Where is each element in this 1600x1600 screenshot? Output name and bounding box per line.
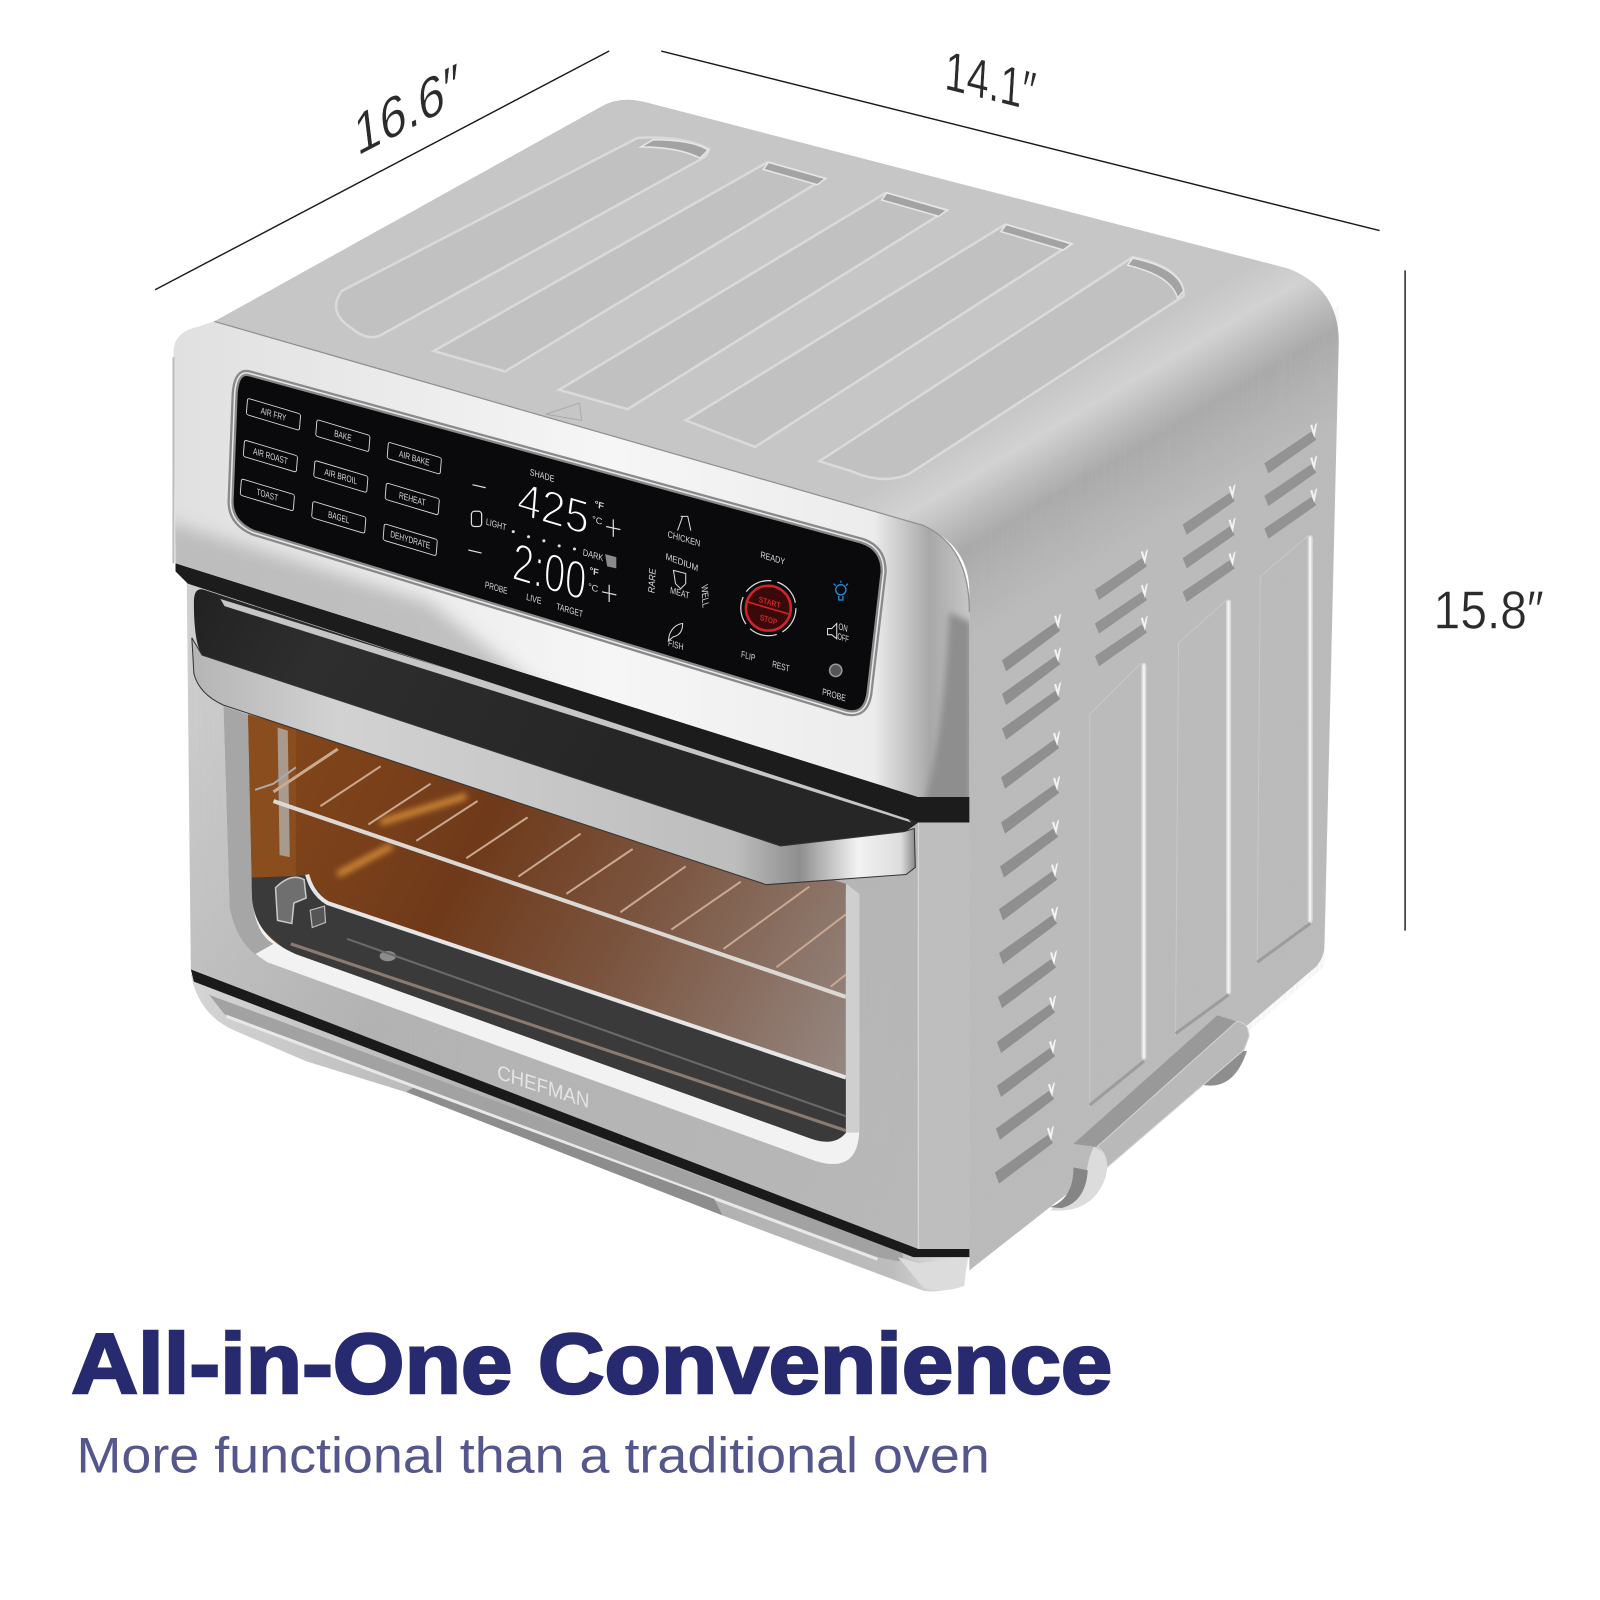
- doneness selector: [646, 516, 711, 652]
- warm light reflections: [338, 796, 466, 874]
- door handle: [192, 589, 918, 885]
- door column seam: [917, 822, 919, 1249]
- mode buttons: AIR ROAST: [253, 445, 288, 466]
- front wheel: [1050, 1147, 1107, 1211]
- side brushed finish: [1250, 307, 1338, 1030]
- foot bar: [1097, 1021, 1249, 1167]
- back wall and tray glow: [245, 704, 857, 1153]
- display: [468, 466, 620, 619]
- start stop button: START: [759, 594, 781, 610]
- mode buttons: AIR BAKE: [399, 448, 430, 468]
- display: TARGET: [556, 600, 584, 619]
- brand logo: CHEFMAN: [497, 1061, 590, 1113]
- icon: speaker: [828, 623, 837, 639]
- display: PROBE: [485, 579, 508, 596]
- side embossed panels: [1090, 536, 1310, 1107]
- display: LIGHT: [486, 516, 507, 533]
- recess above handle: [194, 589, 918, 846]
- doneness selector: FISH: [668, 637, 684, 652]
- mode buttons: REHEAT: [399, 489, 426, 508]
- title: All-in-One Convenience: [71, 1316, 1112, 1412]
- screw: [380, 951, 396, 961]
- side vent column 1: [995, 613, 1061, 1184]
- top vent recesses: [336, 137, 1184, 479]
- dimension: depth line: [155, 51, 609, 290]
- fascia left edge: [172, 357, 174, 563]
- left rack rail: [278, 728, 290, 857]
- rear wheel: [1198, 1051, 1247, 1086]
- dark oven floor: [250, 876, 846, 1148]
- control fascia: [163, 321, 971, 806]
- window bevel: [223, 706, 859, 1164]
- start stop button: [741, 549, 796, 674]
- handle front: [192, 638, 915, 885]
- right controls: OFF: [837, 630, 849, 644]
- display: °C: [592, 513, 603, 527]
- lower bracket: [276, 877, 306, 923]
- start stop button: REST: [772, 658, 790, 674]
- panel bezel and glass: [231, 373, 884, 713]
- display: 425: [515, 473, 591, 546]
- left wall: [248, 714, 296, 898]
- right controls: ON: [838, 620, 848, 634]
- display: °F: [594, 498, 605, 512]
- mode buttons: AIR BROIL: [324, 466, 358, 486]
- dimension: depth 16.6 inches: 16.6″: [351, 51, 464, 169]
- doneness selector: MEAT: [670, 584, 690, 601]
- oven body: top and right side: [214, 100, 1339, 1270]
- black strip under control fascia: [176, 563, 969, 822]
- rack front bar: [273, 801, 846, 997]
- right controls: [822, 581, 849, 703]
- display: LIVE: [526, 591, 542, 606]
- rear foot and wheels: [1050, 1015, 1249, 1211]
- mode buttons: BAGEL: [328, 508, 350, 526]
- display: DARK: [582, 546, 604, 563]
- right controls: PROBE: [822, 686, 846, 703]
- silver highlight strip: [220, 599, 911, 822]
- dimension: height 15.8 inches: 15.8″: [1434, 581, 1544, 641]
- dimension: width 14.1 inches: 14.1″: [943, 39, 1038, 123]
- glass edge lines: [291, 944, 846, 1131]
- mode buttons: BAKE: [334, 427, 352, 443]
- doneness selector: MEDIUM: [665, 551, 699, 574]
- top alignment mark: [546, 403, 582, 420]
- doneness selector: CHICKEN: [667, 528, 701, 549]
- door front: [187, 582, 969, 1249]
- display: SHADE: [529, 466, 555, 484]
- mode buttons: AIR FRY: [260, 405, 287, 423]
- doneness selector: RARE: [646, 567, 658, 594]
- mode buttons: TOAST: [256, 486, 279, 503]
- subtitle: More functional than a traditional oven: [77, 1427, 990, 1483]
- side vent columns 2 to 4: [1095, 422, 1317, 666]
- icon: light bulb: [834, 581, 848, 600]
- mode buttons: [240, 398, 441, 556]
- top vent slots: [641, 140, 1184, 298]
- dimension: height line: [1404, 270, 1406, 931]
- air fryer oven illustration: [163, 100, 1342, 1292]
- dimension: width line: [661, 51, 1380, 231]
- display: °C: [588, 580, 599, 594]
- doneness selector: WELL: [700, 583, 711, 609]
- top edge seam: [214, 321, 969, 612]
- display: 2:00: [510, 531, 589, 613]
- control panel: [231, 373, 884, 713]
- start stop button: FLIP: [741, 648, 756, 663]
- tray front edge: [307, 874, 846, 1078]
- foot top shading: [1073, 1015, 1237, 1147]
- rack wires: [320, 766, 846, 987]
- base trim: [191, 969, 969, 1292]
- probe jack: [830, 664, 842, 677]
- mode buttons: DEHYDRATE: [390, 528, 431, 551]
- start stop button: STOP: [760, 612, 778, 627]
- fascia shading: [175, 518, 536, 676]
- display: °F: [589, 564, 599, 578]
- start stop button: READY: [760, 549, 786, 567]
- door right column highlight: [918, 822, 969, 1249]
- rack back rail: [273, 749, 338, 792]
- oven window interior: [245, 704, 857, 1153]
- door brushed finish: [187, 582, 969, 1255]
